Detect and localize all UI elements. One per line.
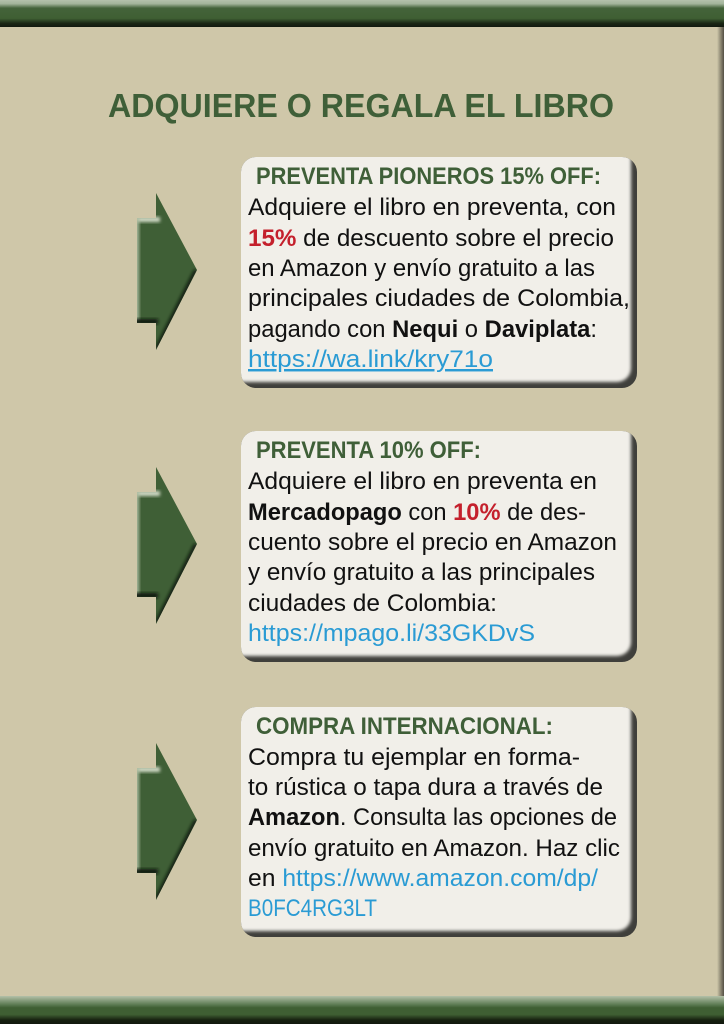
panel 2 body text: y envío gratuito a las principales [248,559,595,586]
panel 2 link: https://mpago.li/33GKDvS [248,620,535,647]
panel: compra internacional [230,696,637,937]
panel 3 heading: COMPRA INTERNACIONAL: [256,713,553,740]
arrow 3 [130,743,198,900]
panel 3 body text: envío gratuito en Amazon. Haz clic [248,835,620,862]
panel 2 box [230,420,637,662]
bottom green band [0,996,724,1024]
panel 1 body text: en Amazon y envío gratuito a las [248,255,595,282]
arrow 2 [130,467,198,624]
panel 1 body text: 15% de descuento sobre el precio [248,225,614,252]
panel 3 body text: en https://www.amazon.com/dp/ [248,865,598,892]
panel 2 heading: PREVENTA 10% OFF: [256,437,481,464]
panel 1 body text: pagando con Nequi o Daviplata: [248,316,597,343]
top green band [0,0,724,27]
panel 3 body text: to rústica o tapa dura a través de [248,774,603,801]
panel 3 body text: Compra tu ejemplar en forma- [248,744,580,771]
panel: preventa pioneros [230,146,637,388]
panel 2 body text: ciudades de Colombia: [248,590,497,617]
title: ADQUIERE O REGALA EL LIBRO [108,87,614,124]
panel 3 body text [248,744,620,892]
arrow 1 [130,193,198,350]
panel 3 link: B0FC4RG3LT [248,895,377,922]
panel 1 body text: Adquiere el libro en preventa, con [248,194,616,221]
panel 3 body text: Amazon. Consulta las opciones de [248,804,617,831]
panel 2 body text: Adquiere el libro en preventa en [248,468,597,495]
panel 1 body text [248,194,630,343]
panel 2 body text: cuento sobre el precio en Amazon [248,529,617,556]
panel 2 body text [248,468,617,617]
panel: preventa 10% [230,420,637,662]
panel 1 heading: PREVENTA PIONEROS 15% OFF: [256,163,601,190]
panel 1 body text: principales ciudades de Colombia, [248,285,630,312]
panel 2 body text: Mercadopago con 10% de des- [248,499,586,526]
panel 3 box [230,696,637,937]
panel 1 link: https://wa.link/kry71o [248,346,493,373]
right edge shading [717,0,724,1024]
panel 1 box [230,146,637,388]
